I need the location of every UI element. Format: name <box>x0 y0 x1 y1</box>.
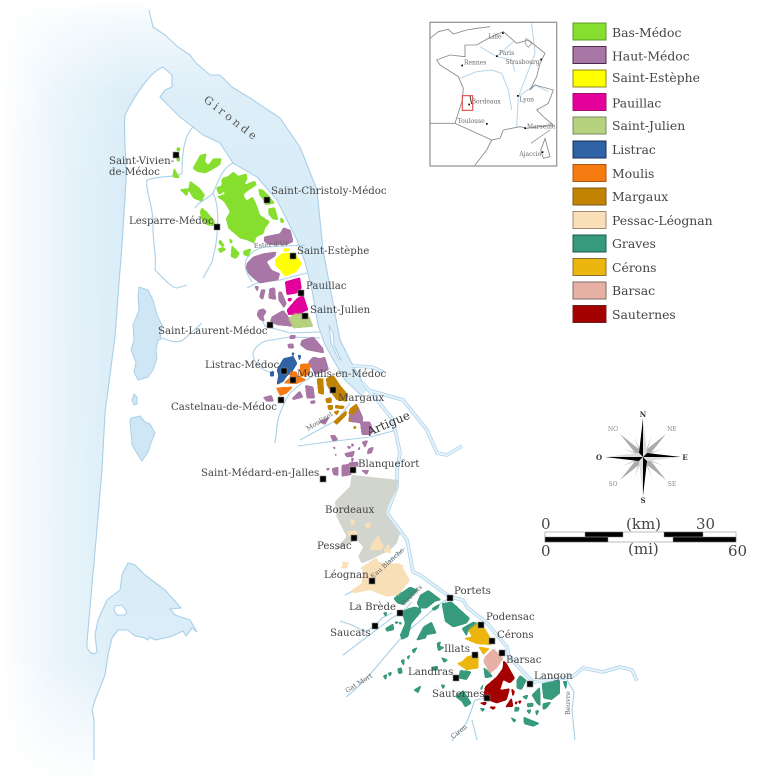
town labels: Bordeaux <box>325 505 375 516</box>
town labels: Saint-Julien <box>310 305 371 316</box>
inset map of France: Ajaccio <box>518 151 542 158</box>
Bordeaux urban area <box>333 475 400 563</box>
town labels: Léognan <box>324 569 369 581</box>
label: Ester d'Ur: Ester d'Ur <box>253 239 290 250</box>
legend: Pessac-Léognan <box>573 212 713 228</box>
legend: Pauillac: Pauillac <box>612 96 661 110</box>
vineyards: central Médoc <box>263 335 403 570</box>
town labels: Saint-Vivien- <box>109 156 174 167</box>
label: Moulinet: Moulinet <box>305 410 335 433</box>
town labels: Moulis-en-Médoc <box>297 368 386 380</box>
town labels: de-Médoc <box>109 166 160 178</box>
inset map of France: Marseille <box>527 124 556 131</box>
label: Saucats stream: Saucats <box>400 583 424 607</box>
label: Gat Mort: Gat Mort <box>344 672 374 695</box>
town markers <box>173 152 533 701</box>
vineyards: northern Médoc <box>172 147 313 328</box>
legend: Listrac <box>573 141 656 158</box>
label: Artigue: Artigue <box>364 408 412 439</box>
label: Gironde: Gironde <box>201 93 262 144</box>
legend: Sauternes <box>573 306 676 322</box>
label: Beuvre: Beuvre <box>564 691 572 715</box>
town labels: Cérons <box>497 629 534 641</box>
town labels: Barsac <box>506 655 542 666</box>
legend: Moulis <box>573 164 654 182</box>
vineyards: Graves and Sauternes <box>341 541 567 727</box>
compass rose: NO <box>608 426 618 433</box>
legend: Cérons <box>573 258 657 276</box>
town labels: Lesparre-Médoc <box>129 215 214 227</box>
town labels: Portets <box>454 586 491 597</box>
lake Hourtin <box>131 287 162 380</box>
inset map of France <box>430 22 557 166</box>
ocean and Gironde estuary <box>21 15 367 750</box>
inset map of France: Strasbourg <box>506 59 540 66</box>
legend: Bas-Médoc: Bas-Médoc <box>612 25 681 40</box>
legend: Saint-Julien: Saint-Julien <box>612 118 685 133</box>
town labels: Illats <box>444 644 470 655</box>
bay island <box>114 605 127 615</box>
coastline <box>87 10 363 760</box>
label: Ciron: Ciron <box>449 722 469 741</box>
compass rose: O <box>596 453 602 462</box>
Garonne and Dordogne <box>352 366 637 682</box>
legend: Saint-Estèphe <box>573 70 700 87</box>
river labels <box>201 93 572 741</box>
scale bar: 30 <box>696 515 715 533</box>
town labels: Margaux <box>338 393 385 404</box>
compass rose: S <box>640 496 646 505</box>
town labels: Pessac <box>317 541 352 552</box>
town labels: La Brède <box>349 601 396 613</box>
legend: Margaux: Margaux <box>612 189 668 204</box>
town labels: Saint-Estèphe <box>297 245 369 257</box>
scale bar: 0 <box>541 542 551 560</box>
town labels: Saint-Christoly-Médoc <box>271 185 387 197</box>
scale bar: 60 <box>728 542 747 560</box>
compass rose: NE <box>667 426 677 433</box>
inset map of France: Paris <box>499 50 514 57</box>
inset map of France: Bordeaux <box>472 99 501 106</box>
legend: Saint-Estèphe: Saint-Estèphe <box>612 70 700 85</box>
scale bar: (km) <box>626 515 661 533</box>
legend: Margaux <box>573 188 668 205</box>
estuary island <box>329 325 341 360</box>
legend: Saint-Julien <box>573 117 685 134</box>
compass rose: N <box>640 410 647 419</box>
streams <box>147 127 575 741</box>
legend: Pessac-Léognan: Pessac-Léognan <box>612 213 713 228</box>
lake islet <box>132 394 137 405</box>
legend: Bas-Médoc <box>573 23 681 40</box>
town labels: Sauternes <box>432 689 484 700</box>
legend: Sauternes: Sauternes <box>612 307 676 322</box>
legend <box>573 23 713 322</box>
scale bar: 0 <box>541 515 551 533</box>
label: Eau Blanche: Eau Blanche <box>369 546 406 580</box>
town labels: Landiras <box>408 667 453 678</box>
legend: Barsac: Barsac <box>612 283 655 298</box>
legend: Haut-Médoc <box>573 46 690 64</box>
town labels: Saucats <box>330 628 371 639</box>
town labels: Pauillac <box>306 281 347 292</box>
legend: Graves <box>573 235 656 252</box>
town labels: Saint-Médard-en-Jalles <box>201 467 319 479</box>
town labels: Castelnau-de-Médoc <box>171 401 277 413</box>
inset map of France: Lyon <box>519 96 534 103</box>
legend: Pauillac <box>573 94 661 110</box>
legend: Cérons: Cérons <box>612 260 657 275</box>
town labels: Blanquefort <box>358 459 420 470</box>
legend: Graves: Graves <box>612 236 656 251</box>
town labels: Listrac-Médoc <box>205 359 280 371</box>
legend: Moulis: Moulis <box>612 166 654 181</box>
lake Lacanau <box>130 416 155 461</box>
scale bar <box>541 515 747 560</box>
inset map of France: Rennes <box>464 59 486 66</box>
compass rose <box>596 410 688 505</box>
scale bar: (mi) <box>628 540 659 558</box>
town labels <box>109 156 573 700</box>
inset map of France: Lille <box>488 33 502 40</box>
town labels: Podensac <box>486 612 535 623</box>
compass rose: SO <box>608 481 618 488</box>
town labels: Langon <box>534 671 573 682</box>
legend: Listrac: Listrac <box>612 142 656 157</box>
town labels: Saint-Laurent-Médoc <box>158 325 268 337</box>
inset map of France: Toulouse <box>458 118 485 125</box>
compass rose: E <box>682 453 688 462</box>
compass rose: SE <box>668 481 676 488</box>
legend: Haut-Médoc: Haut-Médoc <box>612 48 690 64</box>
legend: Barsac <box>573 282 655 299</box>
